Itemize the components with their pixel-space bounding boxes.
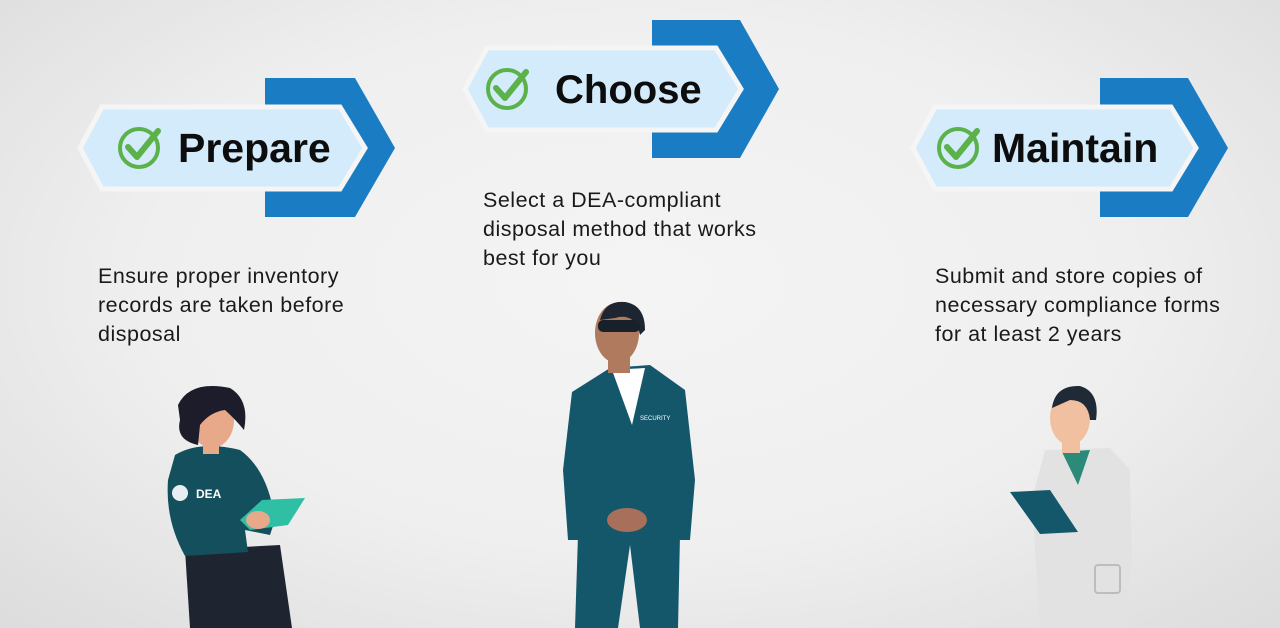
icon: check circle (120, 129, 158, 167)
figure: doctor (1010, 386, 1132, 628)
figure: security guard: SECURITY (640, 416, 670, 422)
text: Prepare description: Ensure proper inventory records are taken before disposal (98, 264, 344, 346)
heading: Choose: Choose (555, 68, 702, 112)
banner: Choose (465, 20, 779, 158)
icon: check circle (488, 70, 526, 108)
figure: DEA agent woman: DEA (196, 487, 222, 501)
figure: security guard (563, 302, 695, 628)
text: Choose description: Select a DEA-compliant disposal method that works best for you (483, 188, 757, 270)
heading: Prepare: Prepare (178, 125, 331, 171)
heading: Maintain: Maintain (992, 125, 1158, 171)
icon: check circle (939, 129, 977, 167)
banner: Maintain (913, 78, 1228, 217)
banner: Prepare (80, 78, 395, 217)
figure: DEA agent woman (168, 386, 305, 628)
text: Maintain description: Submit and store copies of necessary compliance forms for at least 2 years (935, 264, 1220, 346)
